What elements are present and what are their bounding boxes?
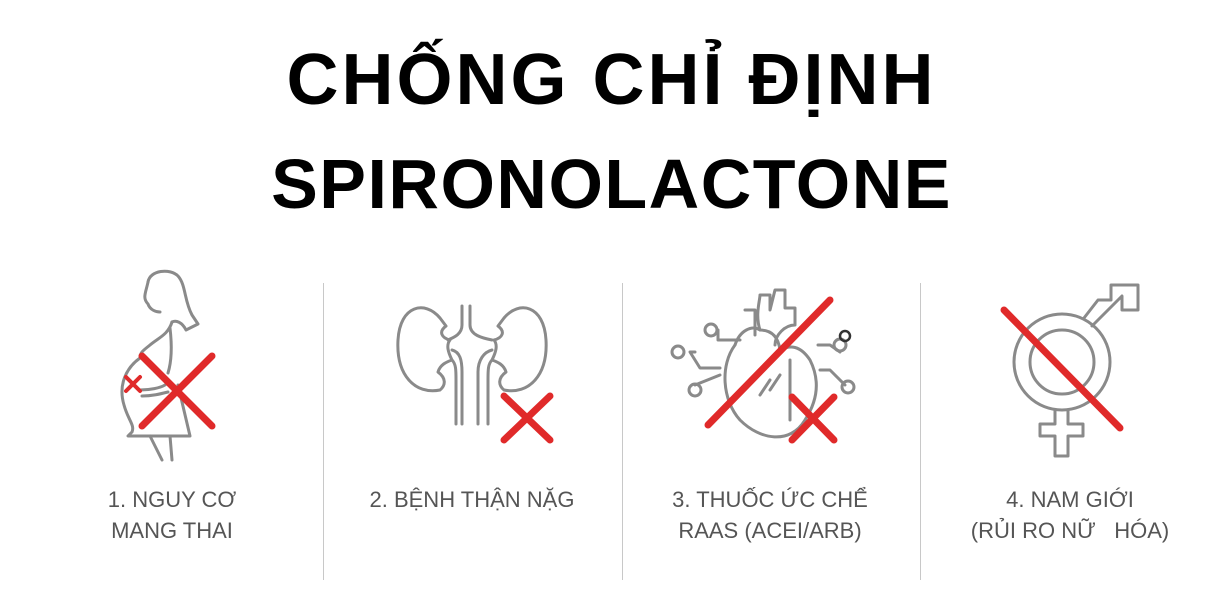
caption 1: 1. NGUY CƠ [108,487,236,512]
caption 3: RAAS (ACEI/ARB) [678,518,862,543]
icon: red cross pregnancy [126,356,212,426]
caption 1 [108,487,236,543]
icon: gender symbol [1014,285,1138,456]
icon: red slash and cross heart [708,300,834,440]
icon: kidneys [398,306,546,424]
icon: red slash gender [1004,310,1120,428]
caption 3: 3. THUỐC ỨC CHỂ [672,487,868,512]
title [271,38,952,223]
caption 4 [971,487,1169,543]
title: SPIRONOLACTONE [271,145,952,223]
caption 4: (RỦI RO NỮ HÓA) [971,518,1169,543]
caption 4: 4. NAM GIỚI [1006,487,1134,512]
icon: red cross kidneys [504,396,550,440]
caption 1: MANG THAI [111,518,233,543]
title: CHỐNG CHỈ ĐỊNH [286,40,936,120]
caption 2: 2. BỆNH THẬN NẶG [370,487,574,512]
caption 3 [672,486,868,543]
icon: heart [672,290,854,437]
icon: pregnant woman [122,271,198,460]
